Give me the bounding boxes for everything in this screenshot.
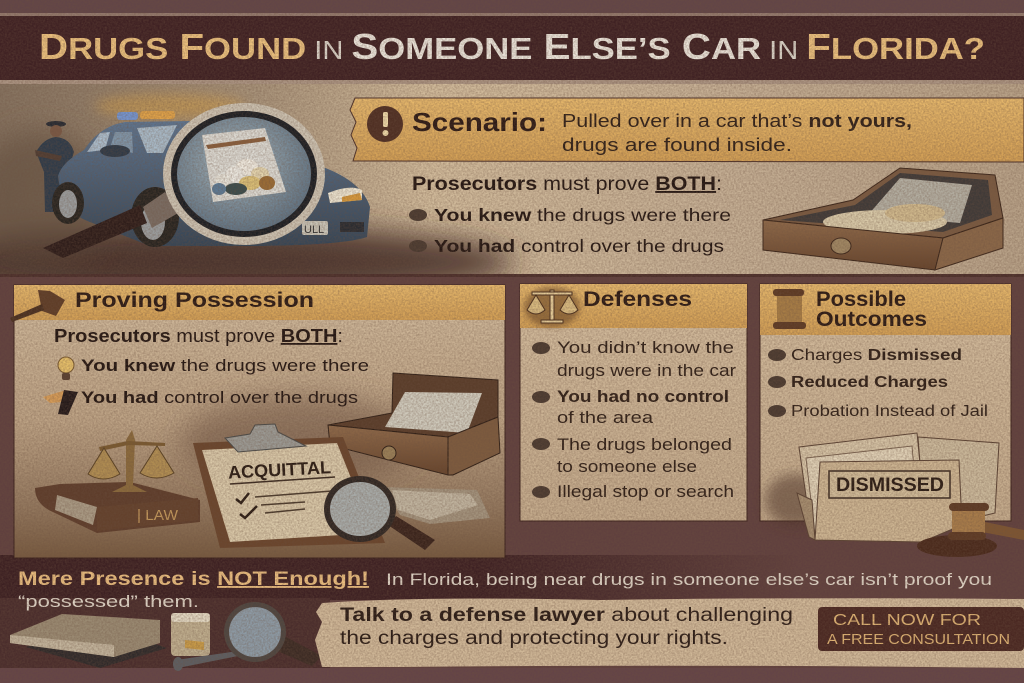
text: prosecutors requirements <box>43 326 369 415</box>
heading: possible outcomes: Outcomes <box>816 308 927 331</box>
list: defenses: You had no control <box>557 387 729 406</box>
list: defenses: The drugs belonged <box>557 435 732 454</box>
icon: magnifying glass with bag <box>43 103 325 258</box>
text: prosecutors requirements: You had control over the drugs <box>81 388 358 407</box>
button: call now: CALL NOW FOR <box>833 612 981 629</box>
button: call now: A FREE CONSULTATION <box>827 631 1010 648</box>
title: DRUGS FOUND IN SOMEONE ELSE’S CAR IN FLORIDA? <box>39 26 985 67</box>
panel: scenario background <box>0 84 1024 298</box>
callout: talk to a defense lawyer <box>315 598 1024 668</box>
text: prosecutors must prove both: You knew the drugs were there <box>434 205 731 225</box>
list: outcomes: Reduced Charges <box>791 374 948 391</box>
text: mere presence callout <box>18 569 992 611</box>
icon: law book and scales <box>35 430 200 533</box>
icon: exclamation <box>367 106 403 142</box>
text: lawyer advice: the charges and protecting your rights. <box>340 628 728 649</box>
title banner <box>0 0 1024 84</box>
icon: small magnifier and papers <box>324 476 490 550</box>
list: defenses: of the area <box>557 408 654 427</box>
panel: possible outcomes <box>760 284 1024 557</box>
icon: dismissed folder: DISMISSED <box>836 475 944 496</box>
list: defenses <box>532 338 736 501</box>
icon: gavel <box>773 289 806 329</box>
list: defenses: to someone else <box>557 457 697 476</box>
icon: dismissed folder <box>797 433 999 542</box>
panel: proving possession <box>10 285 505 558</box>
heading: possible outcomes <box>816 288 927 331</box>
text: prosecutors must prove both <box>409 174 731 256</box>
text: prosecutors requirements: You knew the drugs were there <box>81 356 369 375</box>
text: prosecutors must prove both: You had control over the drugs <box>434 236 724 256</box>
icon: police officer <box>35 121 74 212</box>
panel: defenses <box>520 284 747 521</box>
text: prosecutors requirements: Prosecutors must prove BOTH : <box>54 326 343 346</box>
illustration: police car and officer under magnifier <box>35 103 370 258</box>
text: scenario description: drugs are found inside. <box>562 134 792 155</box>
list: defenses: drugs were in the car <box>557 361 736 380</box>
text: prosecutors must prove both: Prosecutors must prove BOTH : <box>412 174 722 195</box>
list: outcomes <box>768 347 988 420</box>
list: defenses: Illegal stop or search <box>557 482 734 501</box>
text: scenario description <box>562 110 912 155</box>
list: outcomes: Probation Instead of Jail <box>791 403 988 420</box>
icon: acquittal clipboard <box>193 424 385 548</box>
list: outcomes: Charges Dismissed <box>791 347 962 364</box>
button: call now <box>818 607 1024 651</box>
text: lawyer advice: Talk to a defense lawyer about challenging <box>340 605 793 626</box>
callout: scenario banner <box>350 98 1024 162</box>
list: defenses: You didn’t know the <box>557 338 734 357</box>
icon: acquittal clipboard: ACQUITTAL <box>228 457 331 483</box>
illustration: book, jar, magnifier and screw <box>10 602 322 671</box>
text: mere presence callout: In Florida, being near drugs in someone else’s car isn’t proof you <box>386 570 992 589</box>
text: lawyer advice <box>340 605 793 649</box>
icon: gavel with base <box>917 503 1024 557</box>
heading: defenses: Defenses <box>583 288 692 311</box>
icon: open box with bag <box>328 373 500 475</box>
heading: scenario: Scenario: <box>412 107 547 137</box>
icon: police car: ULL <box>304 224 324 236</box>
text: mere presence callout: Mere Presence is NOT Enough! <box>18 569 369 590</box>
icon: scales <box>524 287 580 327</box>
icon: police car <box>52 111 370 247</box>
text: mere presence callout: “possessed” them. <box>18 592 199 611</box>
heading: proving possession: Proving Possession <box>75 289 314 312</box>
icon: open drawer with bag <box>763 168 1003 270</box>
text: scenario description: Pulled over in a car that’s not yours, <box>562 110 912 131</box>
heading: possible outcomes: Possible <box>816 288 906 311</box>
icon: law book and scales: | LAW <box>137 507 179 524</box>
icon: gavel header <box>10 290 65 322</box>
